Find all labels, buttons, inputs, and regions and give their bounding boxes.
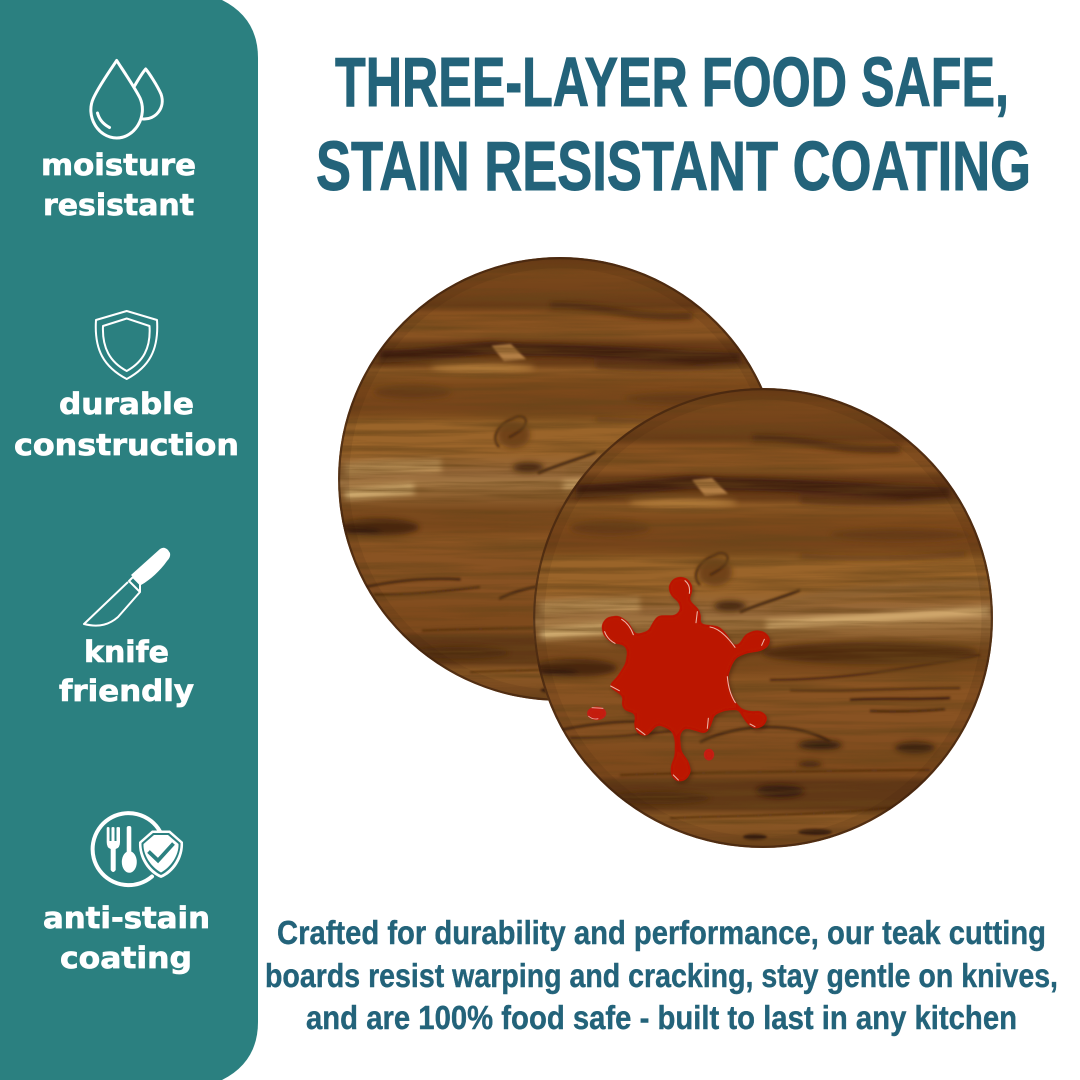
title	[316, 43, 1031, 205]
red sauce splat	[587, 578, 771, 783]
label: anti-stain coating: coating	[60, 941, 192, 975]
icon: knife	[84, 548, 170, 626]
label: durable construction	[14, 387, 239, 462]
icon: water drops	[91, 60, 162, 138]
splat body	[587, 578, 769, 781]
label: knife friendly: knife	[84, 635, 169, 669]
image: front round teak cutting board	[533, 388, 993, 848]
label: knife friendly	[59, 635, 194, 708]
body text	[265, 914, 1058, 1036]
icon: shield	[96, 311, 157, 379]
label: moisture resistant: moisture	[41, 148, 196, 182]
label: durable construction: construction	[14, 428, 239, 462]
label: durable construction: durable	[59, 387, 194, 421]
panel: teal feature sidebar	[0, 0, 258, 1080]
feature: durable construction	[14, 311, 239, 462]
feature: knife friendly	[59, 548, 194, 708]
label: anti-stain coating	[43, 901, 210, 975]
label: anti-stain coating: anti-stain	[43, 901, 210, 935]
icon: cutlery plate with shield check	[93, 813, 183, 885]
feature: moisture resistant	[41, 60, 196, 222]
label: moisture resistant	[41, 148, 196, 222]
feature: anti-stain coating	[43, 813, 210, 975]
splat shadow	[605, 580, 771, 783]
label: moisture resistant: resistant	[43, 188, 194, 222]
label: knife friendly: friendly	[59, 674, 194, 708]
splat highlights	[605, 581, 764, 780]
image: back round teak cutting board	[338, 257, 782, 701]
